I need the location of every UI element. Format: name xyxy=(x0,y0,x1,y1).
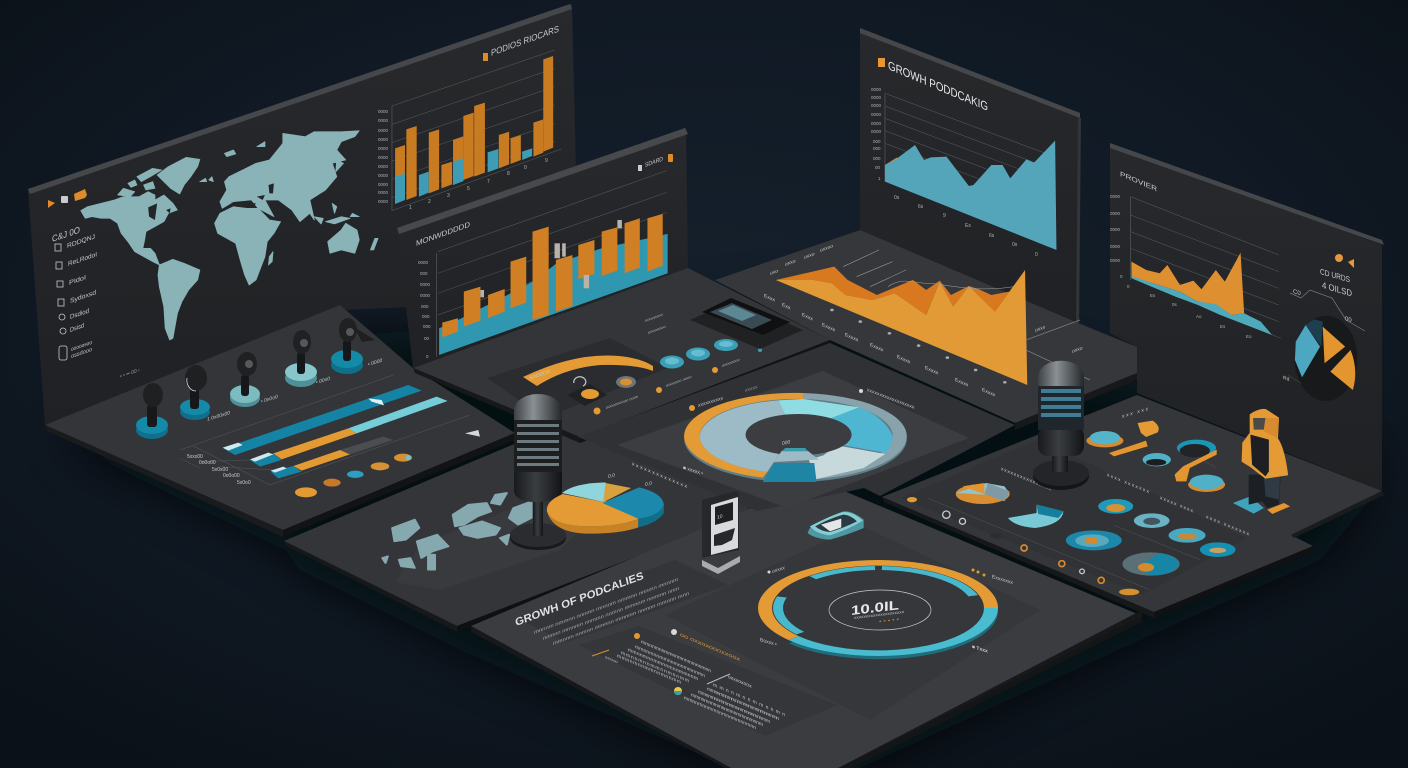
panel: right wall xyxy=(1110,143,1384,491)
area chart: teal xyxy=(885,93,1056,250)
widget icons: oooooooo xyxy=(648,323,666,335)
wall two labels: 00000000 xyxy=(605,296,625,308)
wall one chart labels: 0000 xyxy=(378,128,389,133)
map legend: ossdooo xyxy=(71,347,92,360)
lower text blocks xyxy=(592,629,785,731)
growth wall labels: 0 xyxy=(1035,252,1038,258)
panel: bottom platform xyxy=(471,480,1142,768)
right wall labels: Es xyxy=(1220,324,1226,329)
widget icons: SDDDDD xyxy=(529,369,551,382)
growth wall labels: 0000 xyxy=(871,95,882,100)
growth wall labels: 0s xyxy=(1012,242,1018,248)
growth wall labels: 0000 xyxy=(871,87,882,92)
platform shadows xyxy=(60,300,1370,768)
floor labels under area chart: Exxxx xyxy=(822,322,836,334)
floor labels under area chart: Exxx xyxy=(802,312,813,323)
widget icons: ooooooo oooo xyxy=(666,374,692,388)
ring labels: Exxxxxxx xyxy=(992,574,1013,586)
floor widget labels: xxxx xxxxxxx xyxy=(1107,472,1149,495)
bar chart axis labels xyxy=(187,454,251,486)
floor labels under area chart: Exxxx xyxy=(925,365,939,377)
growth wall labels: 000 xyxy=(873,139,881,144)
right wall labels: PROVIER xyxy=(1120,169,1157,193)
wall two labels: MONWDDDDD xyxy=(416,220,470,248)
growth wall labels: 000 xyxy=(873,146,881,151)
wall one chart labels: PODIOS RIOCARS xyxy=(491,24,559,58)
wall one chart labels: 9 xyxy=(545,158,548,164)
right wall labels: 0000 xyxy=(1110,258,1121,263)
donut labels: xxxxxxxxxx xyxy=(698,395,723,409)
right wall labels: Ao xyxy=(1196,314,1202,319)
wall two labels: 000 xyxy=(423,324,431,329)
bar chart axis labels: 5xxx00 xyxy=(187,454,203,460)
wall one chart labels: 0 xyxy=(524,165,527,171)
floor labels under area chart: Exxx xyxy=(764,293,775,304)
pie labels: xxxxxxxxxxxxxx xyxy=(632,461,687,490)
right wall labels: C0 xyxy=(1293,288,1301,297)
floor labels under area chart: oxxo xyxy=(785,258,796,268)
bar chart axis labels: 5x0x00 xyxy=(212,467,228,473)
right wall labels: 0000 xyxy=(1110,227,1121,232)
mic labels: • 00x0 xyxy=(316,376,330,386)
title and body copy: mmnnm nnmnn mmnnn mmnnm nnmnn mmnnn mnn xyxy=(553,591,689,647)
widget icons: oooooooooo oooo xyxy=(606,393,639,410)
floor widget labels: xxxx xxxxxxx xyxy=(1206,514,1249,538)
map legend: • • •• 00 › xyxy=(120,367,140,380)
lower text blocks: mmnnmnnmmnnmnnmmnnm xyxy=(628,647,698,682)
lower text blocks: mmnnmnnmmnnmnnmm xyxy=(621,650,689,684)
wall two chart xyxy=(436,171,668,357)
lower insets xyxy=(579,626,837,736)
lower text blocks: oxxxoxoox xyxy=(728,674,752,690)
ring labels: oxxxx xyxy=(772,565,785,575)
right wall labels: CD URDS xyxy=(1320,267,1350,284)
wall two labels: 0000 xyxy=(418,260,429,265)
wall one chart labels: 8 xyxy=(507,171,510,177)
floor widget labels: xxxxx xxxx xyxy=(1160,495,1193,515)
map legend: Sydoxsd xyxy=(70,289,96,305)
mic labels: 1 0x00x00 xyxy=(207,410,230,423)
right wall labels: 4 OILSD xyxy=(1322,280,1352,298)
pie chart on wall xyxy=(1288,316,1357,401)
wall one chart labels: 0000 xyxy=(378,155,389,160)
mic labels: • 0x0o0 xyxy=(261,394,278,405)
mini pies xyxy=(956,484,1010,504)
map platform texture xyxy=(395,505,600,590)
floor widget labels xyxy=(1001,406,1249,538)
floor widget labels: xxx xxx xyxy=(1122,406,1148,420)
donut chart xyxy=(684,393,907,482)
donut labels: 000 xyxy=(782,439,791,447)
growth wall labels: 1 xyxy=(878,176,881,181)
world map xyxy=(81,131,378,340)
donut zone xyxy=(665,525,1040,720)
panel: growth area wall xyxy=(860,28,1081,330)
ring labels: ■ Txxx xyxy=(972,644,988,655)
teal badges xyxy=(1098,499,1133,514)
floor labels under area chart: oxxo xyxy=(804,251,815,261)
map legend: C&J 0O xyxy=(52,225,80,244)
map legend: Dsisd xyxy=(70,322,84,334)
widget icons: oooooooo xyxy=(645,311,663,323)
right wall labels: 00 xyxy=(1345,315,1352,324)
wall one chart labels: 0000 xyxy=(378,173,389,178)
widget icons: oooooooo xyxy=(722,356,740,368)
wall one chart labels: 3 xyxy=(447,193,450,199)
wall two labels: 0000 xyxy=(420,282,431,287)
wall one chart labels: 2 xyxy=(428,199,431,205)
right wall labels: 0 xyxy=(1127,284,1130,289)
ring centre value: • • • • • xyxy=(879,617,900,624)
floor labels under area chart: Exxxx xyxy=(982,387,996,399)
inset with gauge xyxy=(487,338,668,418)
wall one chart labels xyxy=(378,24,559,211)
bar chart axis labels: 0o0o00 xyxy=(199,460,216,466)
wall two labels: SDARD xyxy=(645,156,663,169)
phone xyxy=(690,298,803,349)
wall one chart labels: 0000 xyxy=(378,190,389,195)
ring centre value: 10.0IL xyxy=(851,597,899,618)
panel: left floor xyxy=(45,305,515,537)
floor labels under area chart: Exxxx xyxy=(870,342,884,354)
growth wall labels: Es xyxy=(965,223,971,229)
lower text blocks: mmnnmnnmmnnmnnmmnnmnn xyxy=(684,695,756,731)
big microphone xyxy=(510,394,566,550)
growth wall labels: 9 xyxy=(943,213,946,219)
lower text blocks: mmnnmnnmmnnmnnmmnnmnn xyxy=(641,639,711,674)
pie chart on map platform xyxy=(547,482,664,534)
right wall labels: 0s xyxy=(1172,302,1178,307)
right wall area chart xyxy=(1131,197,1281,338)
pie labels: 0.0 xyxy=(608,473,615,480)
donut labels: xxxxx xyxy=(745,384,758,394)
lower text blocks: mmnnmnnmmnnmn xyxy=(713,682,785,718)
wall one chart labels: 0000 xyxy=(378,137,389,142)
wall two labels: 000 xyxy=(420,271,428,276)
phone stand icon: 10 xyxy=(717,514,723,521)
wall one chart labels: 0000 xyxy=(378,109,389,114)
floor labels under area chart: oxxxo xyxy=(820,243,833,254)
growth wall labels: 000 xyxy=(873,156,881,161)
growth wall labels: 0s xyxy=(894,195,900,201)
bar chart axis labels: 0o0o00 xyxy=(223,473,240,479)
donut labels: ■ xxxxx • xyxy=(683,465,703,477)
device icon xyxy=(808,511,864,540)
map legend: ReLRodoI xyxy=(68,251,97,268)
right wall labels xyxy=(1110,169,1365,339)
panel: map platform xyxy=(284,412,754,632)
lower text blocks: mmnnmnnmmnnmnnmmnnmnnmmn xyxy=(707,686,779,722)
wall two labels: 0 00 0 xyxy=(510,331,523,341)
lower text blocks: oxxxoo xyxy=(605,654,618,665)
floor labels under area chart: Exxxx xyxy=(897,354,911,366)
title and body copy: nnmnn mmnnm nnmmn nnmnn mmnnm nnmmn nnm xyxy=(543,586,679,642)
donut labels: xxxxxxxxxxxxxxxxxxx xyxy=(867,387,915,411)
title and body copy: GROWH OF PODCALIES xyxy=(514,570,645,629)
right wall labels: 0 xyxy=(1120,274,1123,279)
wall two labels: 0000 xyxy=(420,293,431,298)
panel: right platform xyxy=(882,395,1384,618)
ring centre value: xxxxxxxxxxxxxxxxxxxxx xyxy=(854,609,904,620)
floor labels under area chart: oxxx xyxy=(1035,324,1046,334)
title text block xyxy=(516,560,728,642)
growth wall labels xyxy=(871,58,1038,258)
lower text blocks: oo oxxoxoooxxoox xyxy=(680,632,740,663)
wall two labels: 000 xyxy=(421,304,429,309)
panel: map wall xyxy=(28,4,576,425)
small microphones xyxy=(136,318,375,439)
growth wall labels: 0000 xyxy=(871,112,882,117)
wall one chart labels: 0000 xyxy=(378,146,389,151)
map legend: RDDQNJ xyxy=(67,234,95,250)
wall one chart labels: 0000 xyxy=(378,118,389,123)
wall one chart labels: 5 xyxy=(467,186,470,192)
donut labels xyxy=(683,384,915,477)
growth wall labels: 6s xyxy=(918,204,924,210)
small map xyxy=(382,493,531,570)
map legend: Dsdiod xyxy=(70,308,89,321)
right wall labels: 0000 xyxy=(1110,244,1121,249)
floor labels under area chart: Exxxx xyxy=(845,332,859,344)
wall two labels: 0000 xyxy=(655,282,665,291)
panel: floor of bar chart wall xyxy=(413,268,830,443)
growth wall labels: 0000 xyxy=(871,129,882,134)
horizontal bar chart xyxy=(180,375,480,497)
ring labels: Boxxx • xyxy=(760,637,777,648)
mic labels xyxy=(207,358,382,423)
wall one chart labels: 7 xyxy=(487,179,490,185)
wall one chart labels: 1 xyxy=(409,205,412,211)
ring centre value xyxy=(829,590,931,630)
map legend: ooooosoo xyxy=(71,340,92,353)
right wall labels: 0000 xyxy=(1110,194,1121,199)
floor labels under area chart: oxxo xyxy=(1072,345,1083,355)
wall two labels xyxy=(416,154,673,359)
bar chart axis labels: 5x0o0 xyxy=(237,480,251,486)
wall one chart labels: 0000 xyxy=(378,164,389,169)
panel: floor behind orange area xyxy=(715,230,1137,423)
map legend xyxy=(48,189,140,380)
ring chart xyxy=(765,563,991,656)
second microphone xyxy=(1033,361,1089,490)
wall one chart labels: 0000 xyxy=(378,182,389,187)
wall two labels: 0000 000 xyxy=(545,312,564,324)
title and body copy: mnnnm nmmnn nnnmn mnnnm nmmnn nnnmn mnnnm xyxy=(534,577,678,636)
presenter figure xyxy=(1233,410,1290,514)
area chart: orange xyxy=(776,250,1027,385)
gauge arc xyxy=(523,355,653,386)
growth wall labels: 0000 xyxy=(871,103,882,108)
ring labels xyxy=(760,565,1013,655)
floor labels under area chart: Exxxx xyxy=(955,377,969,389)
right wall labels: 0000 xyxy=(1110,211,1121,216)
growth wall labels: 00 xyxy=(875,165,881,170)
lower text blocks: mmnnmnnmmnnmnnmmnnmn xyxy=(635,644,705,679)
widget icons xyxy=(529,311,762,414)
panel: centre donut platform xyxy=(578,343,1015,511)
floor labels under area chart: Exx xyxy=(782,302,791,312)
wall two labels: 1 5 00 0 xyxy=(466,342,483,353)
panel: bar chart wall xyxy=(397,128,688,368)
phone stand icon xyxy=(702,491,740,574)
growth wall labels: 6s xyxy=(989,233,995,239)
title and body copy xyxy=(514,570,689,647)
floor labels under area chart xyxy=(764,243,1090,399)
growth wall labels: 0000 xyxy=(871,121,882,126)
right wall labels: Eo xyxy=(1246,334,1252,339)
floor widgets xyxy=(900,421,1247,595)
bar chart: wall one xyxy=(392,50,561,211)
map legend: PIdoI xyxy=(69,274,86,287)
wall two labels: 0 xyxy=(426,354,429,359)
mic labels: • 0000 xyxy=(368,358,382,368)
growth wall labels: GROWH PODDCAKIG xyxy=(888,58,988,114)
map seas xyxy=(148,183,287,222)
wall two labels: 00 xyxy=(424,336,430,341)
panel: right wall: Rd xyxy=(1283,375,1290,383)
floor widget labels: xxxxxxxxxxxxxxxx xyxy=(1001,466,1051,493)
orange icons xyxy=(1021,545,1104,583)
floor labels under area chart: oxo xyxy=(770,268,778,277)
wall two labels: 000 xyxy=(422,314,430,319)
right wall labels: Es xyxy=(1150,293,1156,298)
wall one chart labels: 0000 xyxy=(378,199,389,204)
lower text blocks: mmnnmnnmmnnmnnmm xyxy=(617,653,681,686)
pie labels xyxy=(608,461,687,490)
pie labels: 0.0 xyxy=(645,481,652,488)
lower text blocks: mmnnmnnmmnnmnnmmnnmnnm xyxy=(691,692,763,728)
lower text blocks: mmnnmnnmmnnmnnmmnnmnnmm xyxy=(698,689,770,725)
